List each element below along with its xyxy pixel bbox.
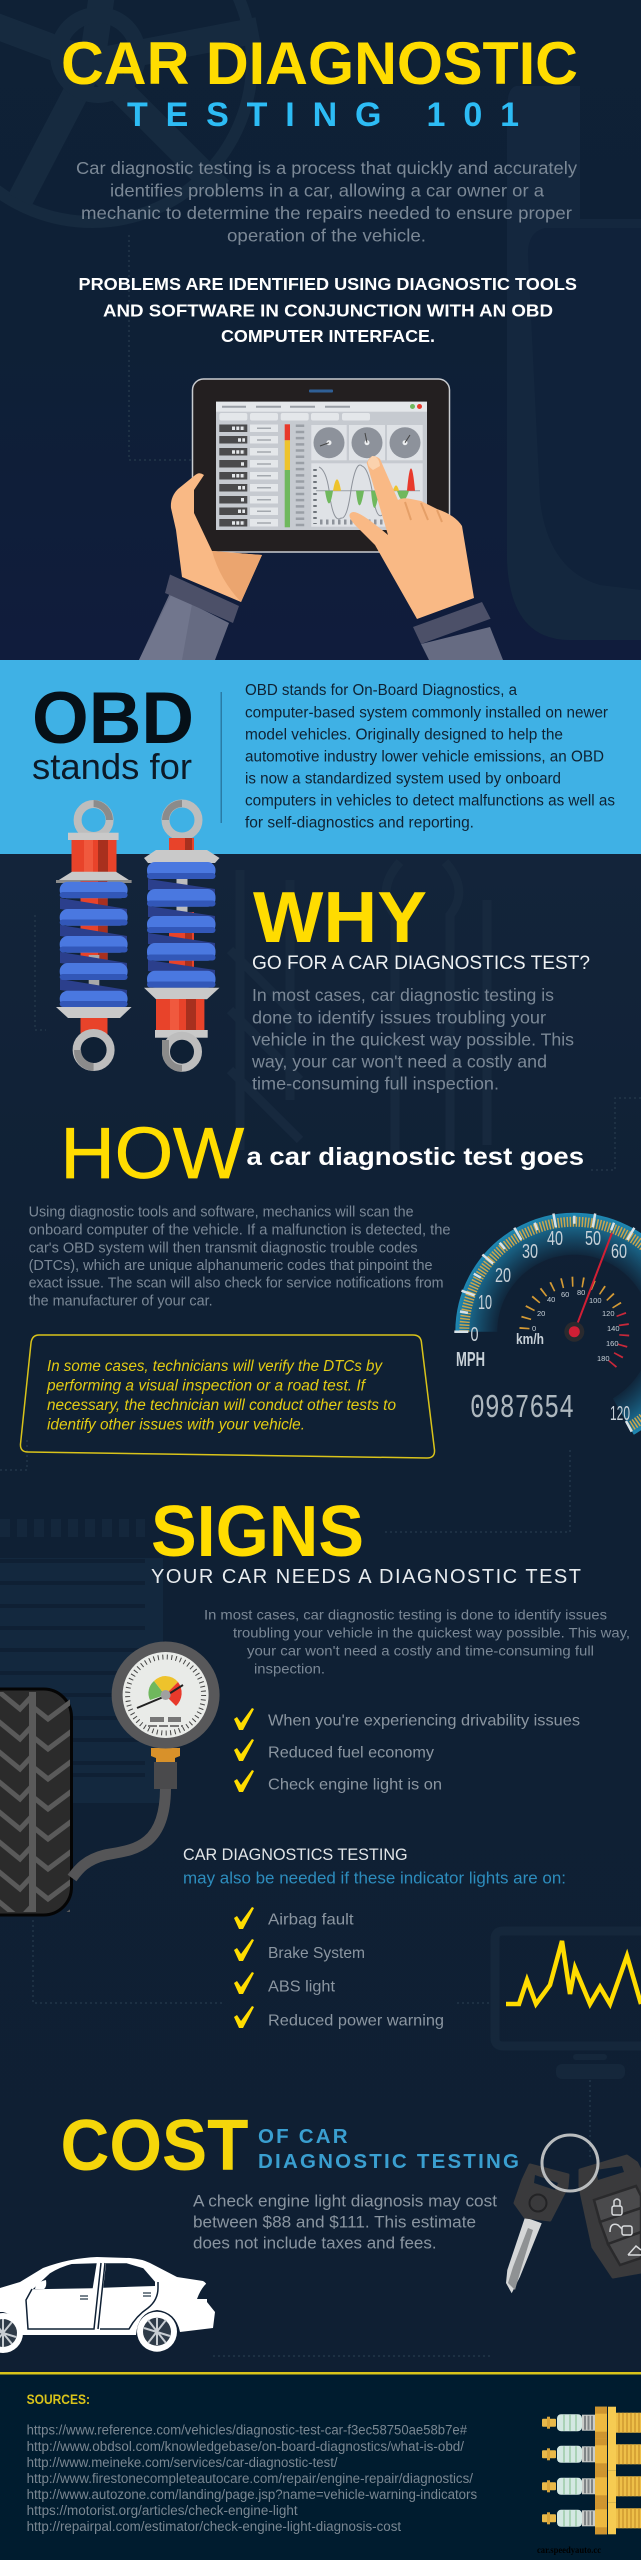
icon: speedometer: 40	[547, 1228, 563, 1250]
heading: why: GO FOR A CAR DIAGNOSTICS TEST?	[252, 953, 590, 974]
OBD paragraph: model vehicles. Originally designed to help the	[245, 726, 563, 743]
decorative tread background behind signs	[0, 1528, 163, 1803]
text: why paragraph: done to identify issues troubling your	[252, 1007, 546, 1027]
sources: https://www.reference.com/vehicles/diagnostic-test-car-f3ec58750ae58b7e#	[27, 2422, 467, 2437]
intro paragraph: Car diagnostic testing is a process that quickly and accurately	[76, 158, 577, 178]
text: how paragraph	[29, 1205, 451, 1310]
intro paragraph	[76, 158, 577, 246]
icon: speedometer: 140	[607, 1324, 620, 1333]
text: why paragraph: way, your car won't need a costly and	[251, 1051, 547, 1071]
icon: car keys	[506, 2135, 641, 2293]
icon: speedometer: 180	[597, 1354, 610, 1363]
text: why paragraph: time-consuming full inspection.	[252, 1073, 499, 1093]
checklist: symptoms: Check engine light is on	[268, 1776, 442, 1793]
icon: right hand and sleeve	[349, 456, 503, 660]
chart: waveform monitor	[495, 1931, 641, 2079]
intro paragraph: identifies problems in a car, allowing a car owner or a	[110, 180, 544, 200]
icon: checkmarks	[234, 1708, 254, 1792]
bold statement: COMPUTER INTERFACE.	[221, 326, 435, 346]
OBD paragraph: is now a standardized system used by onboard	[245, 770, 561, 787]
heading: how: a car diagnostic test goes	[246, 1143, 584, 1171]
checklist: indicator lights: Brake System	[268, 1945, 365, 1962]
bold statement: PROBLEMS ARE IDENTIFIED USING DIAGNOSTIC TOOLS	[78, 274, 577, 294]
subheading: indicator lights: CAR DIAGNOSTICS TESTING	[183, 1846, 408, 1864]
icon: right shock absorber	[144, 800, 220, 1072]
icon: pressure gauge and hose	[72, 1642, 220, 1878]
heading: cost	[60, 2106, 519, 2186]
heading: cost: DIAGNOSTIC TESTING	[258, 2150, 519, 2173]
checklist: indicator lights: Airbag fault	[268, 1912, 354, 1929]
OBD paragraph	[245, 682, 615, 832]
checklist: symptoms: Reduced fuel economy	[268, 1744, 434, 1762]
heading: why: WHY	[253, 878, 427, 958]
OBD heading: OBD	[32, 678, 194, 759]
icon: left shock absorber	[56, 800, 132, 1071]
bold statement	[78, 274, 577, 346]
icon: speedometer: 160	[606, 1339, 619, 1348]
text: cost paragraph: does not include taxes and fees.	[193, 2233, 437, 2252]
callout: technician verification: necessary, the technician will conduct other tests to	[47, 1397, 396, 1414]
sources: http://www.autozone.com/landing/page.jsp?name=vehicle-warning-indicators	[27, 2487, 477, 2502]
sources: http://www.firestonecompleteautocare.com/repair/engine-repair/diagnostics/	[27, 2471, 473, 2486]
checklist: indicator lights: ABS light	[268, 1978, 336, 1995]
heading: how	[60, 1114, 584, 1194]
icon: speedometer: 20	[495, 1265, 511, 1287]
text: why paragraph: In most cases, car diagnostic testing is	[252, 985, 554, 1005]
icon: speedometer: 50	[585, 1228, 601, 1250]
watermark: car.speedyauto.cc	[537, 2546, 601, 2556]
icon: left hand and sleeve	[139, 473, 262, 660]
icon: tire	[0, 1689, 72, 1915]
text: signs paragraph: your car won't need a costly and time-consuming full	[247, 1643, 594, 1659]
icon: speedometer: 0	[470, 1324, 478, 1346]
intro paragraph: operation of the vehicle.	[227, 226, 426, 246]
icon: speedometer: km/h	[516, 1331, 544, 1348]
icon: tablet with diagnostic software	[192, 379, 450, 552]
divider line	[0, 2372, 641, 2374]
text: how paragraph: onboard computer of the vehicle. If a malfunction is detected, the	[29, 1222, 451, 1238]
panel: OBD stands for	[0, 660, 641, 854]
decorative tools behind WHY	[230, 862, 487, 1150]
checklist: indicator lights: Reduced power warning	[268, 2012, 444, 2029]
decorative seat background	[507, 86, 641, 640]
text: why paragraph	[251, 985, 574, 1093]
OBD paragraph: automotive industry lower vehicle emissions, an OBD	[245, 749, 604, 766]
icon: speedometer: 20	[537, 1309, 545, 1318]
sources: SOURCES:	[27, 2392, 90, 2407]
text: how paragraph: exact issue. The scan will also check for service notifications from	[29, 1276, 444, 1292]
OBD paragraph: for self-diagnostics and reporting.	[245, 815, 474, 832]
bold statement: AND SOFTWARE IN CONJUNCTION WITH AN OBD	[103, 300, 553, 320]
text: cost paragraph: A check engine light diagnosis may cost	[193, 2192, 497, 2211]
icon: speedometer: 40	[547, 1295, 555, 1304]
decorative wheel background	[0, 0, 258, 222]
heading: cost: COST	[60, 2106, 249, 2186]
title: CAR DIAGNOSTIC	[61, 30, 578, 97]
callout: technician verification: In some cases, technicians will verify the DTCs by	[47, 1358, 383, 1375]
subheading: indicator lights: may also be needed if these indicator lights are on:	[183, 1870, 566, 1888]
callout: technician verification: identify other issues with your vehicle.	[47, 1416, 305, 1433]
background: main body	[0, 854, 641, 2373]
sources: http://www.meineke.com/services/car-diagnostic-test/	[27, 2455, 338, 2470]
text: signs paragraph: troubling your vehicle in the quickest way possible. This way,	[233, 1624, 630, 1640]
title: TESTING 101	[127, 96, 519, 134]
text: how paragraph: Using diagnostic tools and software, mechanics will scan the	[29, 1205, 414, 1221]
icon: checkmarks	[234, 1907, 254, 2028]
text: why paragraph: vehicle in the quickest way possible. This	[252, 1029, 574, 1049]
heading: signs	[151, 1492, 581, 1588]
OBD paragraph: computers in vehicles to detect malfunctions as well as	[245, 793, 615, 810]
icon: white car	[0, 2257, 215, 2353]
icon: speedometer: 80	[577, 1288, 585, 1297]
icon: spark plugs	[542, 2407, 641, 2534]
icon: speedometer: 120	[602, 1309, 615, 1318]
icon: speedometer	[454, 1214, 641, 1432]
background: sources footer	[0, 2373, 641, 2560]
sources: https://motorist.org/articles/check-engine-light	[27, 2503, 298, 2518]
icon: speedometer: 60	[611, 1241, 627, 1263]
icon: speedometer: MPH	[456, 1349, 485, 1371]
icon: speedometer: 10	[478, 1292, 492, 1314]
heading: cost: OF CAR	[258, 2125, 348, 2148]
checklist: symptoms: When you're experiencing drivability issues	[268, 1713, 580, 1730]
checklist: symptoms	[234, 1708, 580, 1793]
sources	[27, 2392, 477, 2534]
OBD heading: stands for	[32, 746, 192, 787]
OBD paragraph: OBD stands for On-Board Diagnostics, a	[245, 682, 517, 699]
icon: speedometer: 60	[561, 1290, 569, 1299]
text: how paragraph: car's OBD system will then transmit diagnostic trouble codes	[29, 1240, 418, 1256]
callout: technician verification: performing a visual inspection or a road test. If	[46, 1378, 367, 1395]
icon: speedometer: 100	[589, 1296, 602, 1305]
title	[61, 30, 578, 134]
text: signs paragraph	[204, 1606, 630, 1677]
background: intro section	[0, 0, 641, 660]
text: signs paragraph: In most cases, car diagnostic testing is done to identify issues	[204, 1606, 607, 1622]
checklist: indicator lights	[234, 1907, 444, 2029]
intro paragraph: mechanic to determine the repairs needed to ensure proper	[81, 203, 572, 223]
heading: signs: SIGNS	[151, 1492, 364, 1572]
icon: speedometer: 0987654	[470, 1390, 574, 1427]
OBD paragraph: computer-based system commonly installed on newer	[245, 704, 608, 721]
sources: http://www.obdsol.com/knowledgebase/on-board-diagnostics/what-is-obd/	[27, 2439, 464, 2454]
icon: speedometer: 0	[532, 1324, 536, 1333]
subheading: indicator lights	[183, 1846, 566, 1888]
sources: http://repairpal.com/estimator/check-engine-light-diagnosis-cost	[27, 2519, 401, 2534]
callout: technician verification	[20, 1335, 435, 1458]
heading: how: HOW	[60, 1114, 244, 1194]
text: how paragraph: (DTCs), which are unique alphanumeric codes that pinpoint the	[29, 1258, 433, 1274]
icon: speedometer: 30	[522, 1241, 538, 1263]
heading: why	[252, 878, 590, 974]
heading: signs: YOUR CAR NEEDS A DIAGNOSTIC TEST	[151, 1566, 581, 1588]
text: signs paragraph: inspection.	[254, 1661, 325, 1677]
text: cost paragraph: between $88 and $111. This estimate	[193, 2213, 476, 2232]
text: cost paragraph	[193, 2192, 497, 2252]
text: how paragraph: the manufacturer of your car.	[29, 1294, 213, 1310]
